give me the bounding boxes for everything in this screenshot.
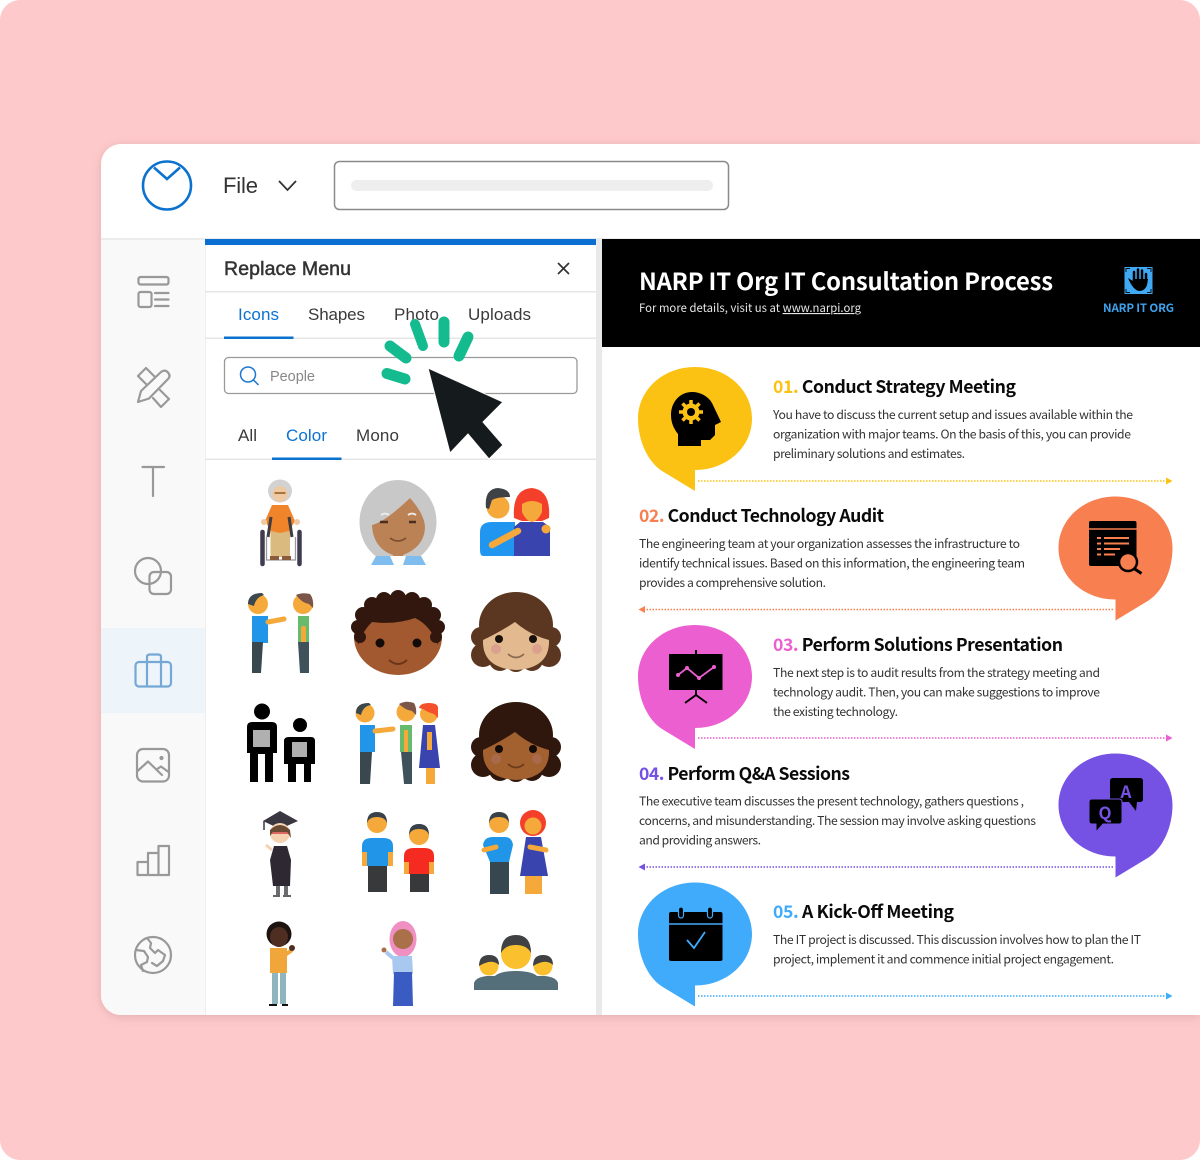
icon: layout [138,277,168,307]
source tabs [205,305,596,339]
top toolbar [101,162,1200,240]
icon: wheelchair elder [261,480,300,564]
app window [101,144,1200,1015]
icon: presentation board [669,650,722,703]
description: You have to discuss the current setup and issues available within the [772,405,1133,423]
speech bubble [638,625,752,749]
cursor arrow [428,368,503,459]
description: The engineering team at your organization assesses the infrastructure to [639,534,1020,552]
icon: group of three [474,935,558,990]
icon: woman waving [266,922,295,1005]
description [772,405,1133,462]
icon: question and answer bubbles: Q [1098,799,1112,824]
click sparks [387,322,468,379]
icon: graduate [263,811,298,896]
heading: 05. A Kick-Off Meeting [773,899,954,924]
colour filter tabs [205,426,596,460]
icon: brown haired girl [471,592,561,672]
icon: globe [135,937,171,973]
speech bubble [1058,496,1172,620]
dotted arrow [638,864,1113,870]
dotted arrow [698,992,1172,1000]
icon: question and answer bubbles: A [1120,778,1132,803]
header band [602,239,1200,347]
description: project, implement it and commence initial project engagement. [773,950,1114,968]
source tabs: Photo [394,305,439,324]
description: and providing answers. [639,830,761,848]
colour filter tabs: Color [286,426,327,445]
speech bubble [1058,754,1172,878]
description [773,663,1100,720]
dotted arrow [698,478,1172,484]
heading: 01. Conduct Strategy Meeting [773,374,1016,399]
step 04 [638,754,1172,878]
left icon sidebar [101,240,205,1015]
icon: couple embracing [480,488,550,556]
brand logo [1103,267,1174,316]
heading: 04. Perform Q&A Sessions [639,761,850,786]
icon: curly haired boy [351,590,445,675]
icon: two boys [362,812,434,892]
icon: close [558,263,569,274]
icon: three people talking [356,702,440,784]
icon: bar chart [138,846,169,875]
search field [224,358,577,394]
icon: question and answer bubbles [1089,778,1143,832]
step 05 [638,882,1172,1006]
replace menu panel [205,239,602,1015]
description: The next step is to audit results from the strategy meeting and [773,663,1100,681]
search field: People [270,369,315,385]
file menu [223,173,296,198]
description: technology audit. Then, you can make suggestions to improve [773,682,1100,700]
colour filter tabs: All [238,426,257,445]
description [639,792,1036,848]
icon: briefcase [136,654,171,686]
speech bubble [638,882,752,1006]
description: concerns, and misunderstanding. The session may involve asking questions [639,811,1036,829]
icon: calendar with check [669,907,722,961]
icon: two people talking [248,593,313,673]
description [773,930,1141,968]
heading: 02. Conduct Technology Audit [639,503,885,528]
step 02 [638,496,1172,620]
panel accent bar [205,239,596,245]
step 03 [638,625,1172,749]
description: preliminary solutions and estimates. [773,444,965,462]
description: The IT project is discussed. This discussion involves how to plan the IT [773,930,1141,948]
source tabs: Uploads [468,305,531,324]
speech bubble [638,367,752,491]
dotted arrow [698,734,1172,742]
icon: dark haired girl [471,702,561,782]
active sidebar row [101,628,205,713]
source tabs: Icons [238,305,279,324]
description: organization with major teams. On the basis of this, you can provide [773,424,1131,442]
icon: logo [143,162,191,210]
step 01 [638,367,1172,491]
brand logo: NARP IT ORG [1103,300,1174,316]
icon: report with magnifier [1089,521,1142,574]
icon: pencil and ruler [138,368,170,407]
source tabs: Shapes [308,305,365,324]
icon: shapes [135,558,171,594]
icon: grey haired woman [360,480,436,565]
infographic canvas [602,239,1200,1015]
colour filter tabs: Mono [356,426,399,445]
file menu: File [223,173,258,198]
icon: head with gear [671,392,721,446]
description: The executive team discusses the present technology, gathers questions , [639,792,1024,810]
icon: text [142,467,164,496]
description: provides a comprehensive solution. [639,573,826,591]
description: the existing technology. [773,702,898,720]
icon: woman in hijab [382,921,416,1006]
dotted arrow [638,606,1113,613]
icon: image [137,749,169,782]
description [639,534,1025,591]
document name field [334,162,728,210]
subtitle: For more details, visit us at www.narpi.org [639,300,862,316]
panel heading: Replace Menu [224,258,351,280]
main title: NARP IT Org IT Consultation Process [639,262,1053,297]
description: identify technical issues. Based on this information, the engineering team [639,554,1025,572]
icon: man and woman [483,810,548,894]
icon: two pictogram people [247,704,315,782]
heading: 03. Perform Solutions Presentation [773,632,1063,657]
